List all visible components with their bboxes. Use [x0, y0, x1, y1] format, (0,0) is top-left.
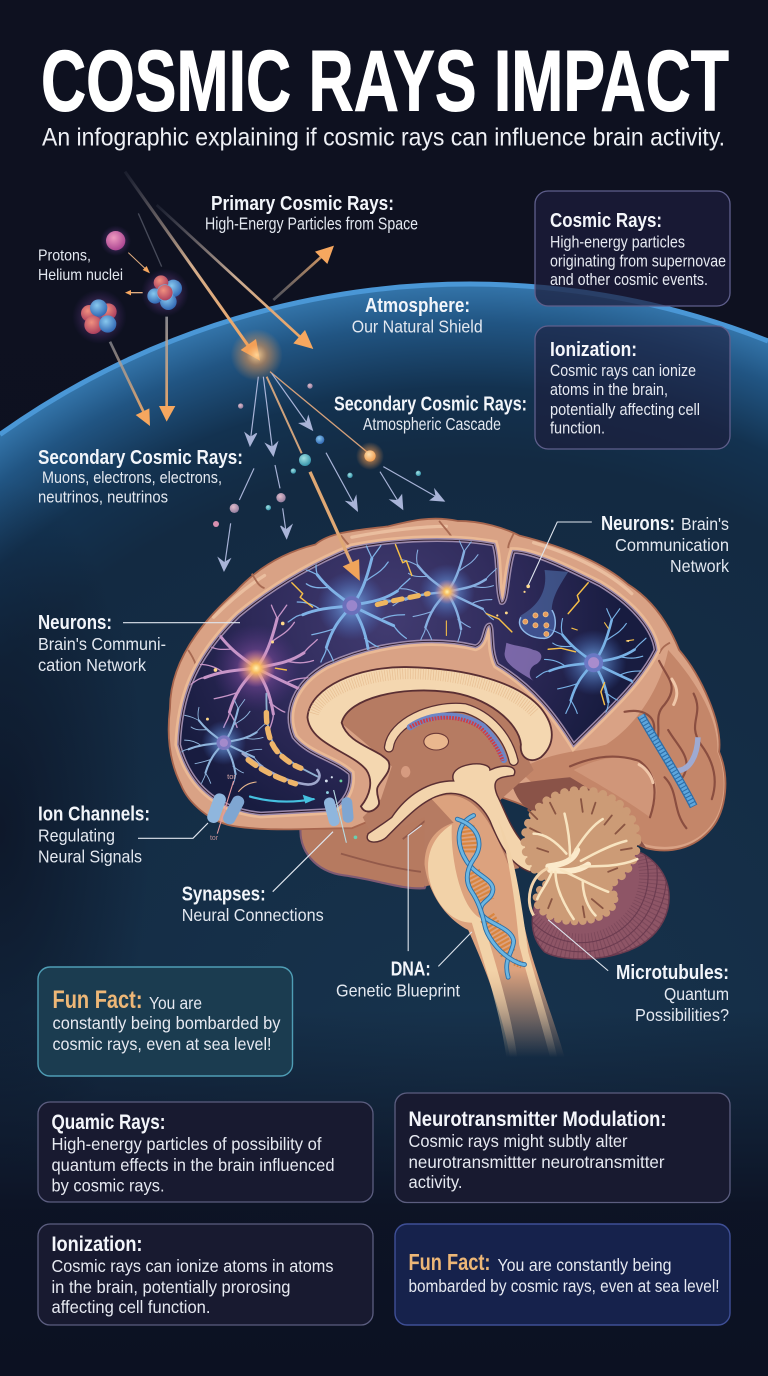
temporal lobe	[300, 810, 457, 888]
panel: fun fact right: Fun Fact:	[408, 1249, 490, 1275]
panel: quamic rays: quantum effects in the brain influenced	[52, 1155, 334, 1175]
label: DNA	[336, 958, 460, 1000]
synapse terminal	[505, 570, 568, 681]
panel: ionization top: function.	[550, 420, 605, 438]
ion channels and signals: tor	[210, 835, 219, 842]
cosmic ray arrows and particles	[72, 172, 444, 571]
label: protons: Helium nuclei	[38, 267, 123, 284]
panel: neurotransmitter modulation: Cosmic rays might subtly alter	[408, 1131, 628, 1151]
leader lines: left labels	[123, 623, 333, 892]
panel: neurotransmitter modulation: activity.	[408, 1172, 462, 1192]
helium nucleus upper	[141, 269, 189, 317]
panel: fun fact right	[395, 1224, 730, 1325]
label: protons: Protons,	[38, 248, 91, 265]
neuron: upper orange core	[393, 541, 497, 641]
label: protons	[38, 248, 123, 284]
helium nucleus lower	[72, 289, 127, 344]
label: atmosphere: Atmosphere:	[365, 295, 470, 317]
label: ion channels: Neural Signals	[38, 847, 142, 867]
panel: ionization top: Ionization:	[550, 339, 637, 361]
panel: cosmic rays: High-energy particles	[550, 233, 685, 251]
label: secondary rays left: Secondary Cosmic Rays:	[38, 447, 243, 469]
neuron: right blue	[536, 609, 646, 715]
DNA double helix	[457, 815, 525, 977]
label: DNA: Genetic Blueprint	[336, 980, 460, 1000]
cerebellum ribbed base	[532, 852, 670, 960]
label: neurons right: Communication	[615, 535, 729, 555]
label: microtubules	[616, 962, 729, 1025]
label: secondary rays left	[38, 447, 243, 507]
panel: cosmic rays: and other cosmic events.	[550, 271, 708, 289]
panel: quamic rays	[38, 1102, 373, 1202]
incoming ray arrow to brain	[310, 472, 360, 581]
fornix	[389, 708, 514, 761]
panel: ionization top	[535, 326, 730, 449]
neurons	[178, 541, 646, 785]
label: primary cosmic rays: High-Energy Particles from Space	[205, 214, 418, 234]
panel: ionization top: Cosmic rays can ionize	[550, 362, 696, 380]
posterior lobe folds	[519, 650, 724, 847]
brain core	[341, 691, 534, 886]
ion channels and signals: tor	[227, 772, 236, 781]
panel: quamic rays: by cosmic rays.	[52, 1176, 164, 1196]
label: atmosphere: Our Natural Shield	[352, 317, 483, 337]
secondary cascade arrows	[219, 373, 444, 571]
label: neurons right: Brain's	[681, 514, 729, 534]
label: neurons right: Neurons:	[601, 513, 675, 535]
subtitle: An infographic explaining if cosmic rays can influence brain activity.	[42, 124, 725, 152]
lower lobe highlight	[574, 758, 656, 817]
panel: fun fact right: You are constantly being	[498, 1255, 672, 1275]
cerebrum	[169, 519, 725, 850]
label: secondary rays left: Muons, electrons, electrons,	[42, 469, 222, 487]
label: microtubules: Quantum	[664, 984, 729, 1004]
brain illustration	[169, 472, 725, 1057]
panel: fun fact right: bombarded by cosmic rays, even at sea level!	[408, 1276, 720, 1296]
label: ion channels: Regulating	[38, 826, 115, 846]
neuron: upper blue	[288, 546, 410, 664]
label: microtubules: Possibilities?	[635, 1005, 729, 1025]
panel: ionization bottom: Ionization:	[52, 1233, 142, 1256]
label: atmosphere	[352, 295, 483, 337]
panel: fun fact left: cosmic rays, even at sea level!	[52, 1034, 272, 1054]
panel: ionization bottom: in the brain, potentially prorosing	[52, 1277, 290, 1297]
secondary particles	[213, 383, 421, 527]
label: synapses: Neural Connections	[182, 905, 324, 925]
panel: ionization bottom	[38, 1224, 373, 1325]
axons with myelin	[243, 594, 428, 785]
microtubule band	[641, 715, 698, 806]
panel: neurotransmitter modulation: Neurotransmitter Modulation:	[408, 1108, 666, 1131]
panel: ionization bottom: affecting cell function.	[52, 1297, 210, 1317]
label: secondary rays left: neutrinos, neutrinos	[38, 489, 168, 507]
label: neurons right	[601, 513, 729, 576]
panel: ionization top: potentially affecting cell	[550, 401, 700, 419]
label: neurons right: Network	[670, 556, 729, 576]
ion channels and signals	[206, 772, 357, 843]
midbrain band	[367, 764, 548, 872]
panel: fun fact left: constantly being bombarded by	[52, 1013, 281, 1033]
brainstem and spinal cord	[425, 795, 565, 1057]
atmosphere dome	[0, 284, 768, 1376]
panel: cosmic rays: originating from supernovae	[550, 253, 726, 271]
panel: ionization bottom: Cosmic rays can ionize atoms in atoms	[52, 1256, 334, 1276]
neuron cavity	[179, 540, 655, 814]
label: primary cosmic rays	[205, 193, 418, 234]
thalamus	[401, 733, 449, 778]
corpus callosum	[307, 667, 552, 812]
label: synapses	[182, 884, 324, 925]
panel: quamic rays: High-energy particles of possibility of	[52, 1134, 322, 1154]
label: neurons left: Brain's Communi-	[38, 634, 166, 654]
label: neurons left	[38, 612, 166, 675]
neuron: lower-left blue	[178, 700, 266, 785]
panel: cosmic rays: Cosmic Rays:	[550, 210, 662, 232]
label: ion channels: Ion Channels:	[38, 804, 150, 826]
cerebellum	[525, 790, 637, 922]
label: neurons left: cation Network	[38, 655, 146, 675]
primary ray arrows	[110, 172, 367, 453]
label: ion channels	[38, 804, 150, 867]
panel: fun fact left: Fun Fact:	[52, 986, 142, 1014]
label: secondary rays right	[334, 394, 527, 434]
signal sparks	[275, 545, 634, 705]
label: neurons left: Neurons:	[38, 612, 112, 634]
panel: fun fact left	[38, 967, 292, 1076]
panel: fun fact left: You are	[149, 993, 202, 1013]
label: secondary rays right: Atmospheric Cascade	[363, 414, 501, 434]
panel: quamic rays: Quamic Rays:	[52, 1111, 166, 1134]
neuron: left bright pink	[189, 605, 317, 729]
impact glow	[231, 329, 283, 381]
panel: cosmic rays	[535, 191, 730, 306]
label: synapses: Synapses:	[182, 884, 266, 906]
dark gap above cerebellum	[512, 777, 646, 848]
panel: neurotransmitter modulation	[395, 1093, 730, 1202]
label: primary cosmic rays: Primary Cosmic Rays:	[211, 193, 394, 215]
panel: ionization top: atoms in the brain,	[550, 381, 668, 399]
leader lines	[408, 522, 608, 971]
proton	[100, 225, 131, 256]
label: DNA: DNA:	[391, 958, 431, 980]
panel: neurotransmitter modulation: neurotransmittter neurotransmitter	[408, 1152, 665, 1172]
label: microtubules: Microtubules:	[616, 962, 729, 984]
label: secondary rays right: Secondary Cosmic Rays:	[334, 394, 527, 416]
